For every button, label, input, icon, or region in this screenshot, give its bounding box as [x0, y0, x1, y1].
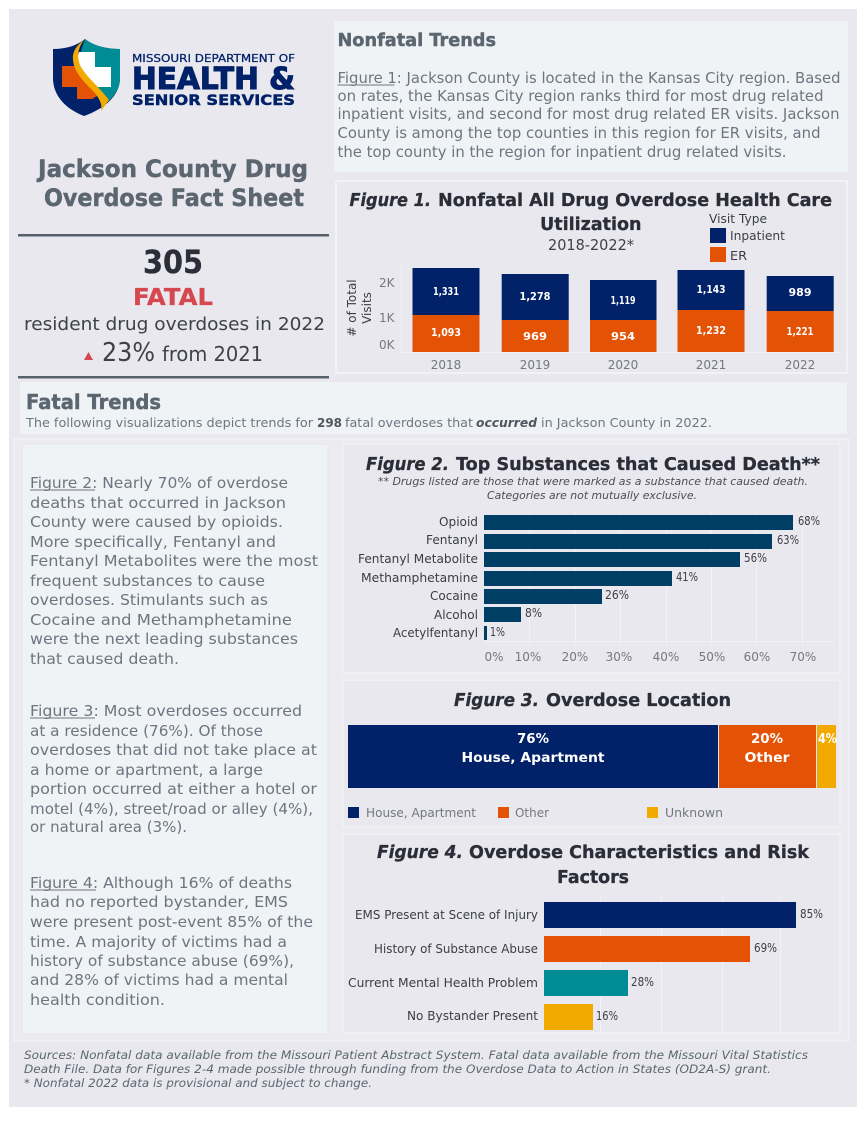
y axis: Visits — [360, 292, 374, 324]
text block: figure 1 description: the top county in the region for inpatient drug related visits. — [338, 143, 786, 161]
bar: 2020 — [590, 280, 656, 372]
text block: figure 4 description — [30, 874, 313, 1009]
icon: up triangle — [84, 352, 93, 360]
bar: 2022: 989 — [788, 286, 812, 299]
bar: history of substance abuse: 69% — [754, 941, 777, 955]
text block: sources and notes — [24, 1048, 808, 1090]
heading: figure 3: Figure 3. — [454, 690, 539, 711]
stacked bar chart — [401, 265, 841, 372]
bar: current mental health problem: Current Mental Health Problem — [348, 976, 538, 990]
y axis: 2K — [379, 276, 396, 290]
title: Overdose Fact Sheet — [44, 184, 304, 212]
segment: other — [719, 725, 816, 788]
title: Jackson County Drug — [36, 155, 308, 183]
title — [36, 155, 308, 212]
legend: location: Other — [515, 806, 549, 820]
heading: figure 4: Factors — [557, 867, 629, 888]
bar: 2022: 2022 — [785, 358, 815, 372]
x axis ticks: 20% — [562, 650, 588, 664]
legend: visit type: ER — [730, 249, 747, 263]
text block: figure 2 description — [30, 474, 318, 668]
text block: figure 2 description: frequent substances to cause — [30, 572, 265, 590]
text block: figure 1 description: Figure 1: Jackson County is located in the Kansas City region. Based — [338, 69, 840, 87]
bar: 2019: 969 — [523, 330, 547, 343]
bar: 2020: 1,119 — [610, 294, 636, 307]
text block: figure 2 description: Figure 2: Nearly 70% of overdose — [30, 474, 288, 492]
text block: figure 4 description: and 28% of victims had a mental — [30, 971, 288, 989]
bar: fentanyl — [426, 533, 799, 549]
bar: 2018 — [412, 268, 480, 372]
panel: figure 3 overdose location — [343, 680, 840, 827]
bar: 2018: 1,331 — [433, 285, 459, 298]
bar: opioid — [439, 514, 820, 530]
bar: history of substance abuse: History of Substance Abuse — [374, 942, 538, 956]
x axis ticks: 0% — [484, 650, 504, 664]
logo text: HEALTH & — [132, 62, 295, 97]
note: drug categories — [378, 476, 808, 502]
text block: figure 1 description: on rates, the Kansas City region ranks third for most drug related — [338, 87, 824, 105]
bar: 2022: 1,221 — [786, 325, 814, 338]
bar: fentanyl: Fentanyl — [426, 533, 478, 547]
bar: EMS present: EMS Present at Scene of Injury — [355, 908, 538, 922]
text block: fatal trends intro: occurred — [476, 415, 538, 430]
bar: EMS present — [355, 902, 823, 928]
bar: cocaine — [430, 588, 629, 604]
bar: alcohol — [434, 606, 542, 622]
bar: 2020: 954 — [611, 330, 635, 343]
text block: fatal trends intro: 298 — [317, 415, 342, 430]
legend: visit type: Inpatient — [730, 229, 785, 243]
bar: 2019: 2019 — [520, 358, 550, 372]
callout: fatal overdose count — [24, 243, 325, 368]
text block: figure 2 description: deaths that occurred in Jackson — [30, 494, 286, 512]
heading: figure 3 — [454, 690, 731, 711]
bar: methamphetamine — [361, 570, 698, 586]
bar: cocaine: 26% — [605, 588, 629, 602]
bar: acetylfentanyl: Acetylfentanyl — [393, 626, 478, 640]
text block: figure 3 description: or natural area (3%). — [30, 818, 187, 836]
text block: figure 2 description: that caused death. — [30, 650, 179, 668]
segment: house, apartment: House, Apartment — [462, 751, 604, 766]
heading: figure 1 — [350, 190, 832, 254]
bar: 2021: 1,232 — [696, 324, 726, 337]
text block: sources and notes: Death File. Data for Figures 2-4 made possible through funding from the Overdose Data to Action in States (OD2A-S) grant. — [24, 1062, 771, 1076]
segment: house, apartment — [348, 725, 718, 788]
callout: fatal overdose count: 23% — [102, 338, 155, 368]
y axis: # of Total — [345, 279, 359, 337]
bar: methamphetamine: 41% — [676, 570, 698, 584]
bar: opioid: 68% — [798, 514, 820, 528]
x axis ticks: 10% — [515, 650, 541, 664]
logo text: SENIOR SERVICES — [132, 93, 295, 109]
text block: figure 3 description: a home or apartment, a large — [30, 761, 263, 779]
segment: house, apartment: 76% — [517, 732, 549, 747]
panel: figure 2 top substances — [343, 444, 840, 673]
heading: figure 1: Figure 1. — [350, 190, 431, 211]
text block: figure 2 description: County were caused by opioids. — [30, 513, 283, 531]
heading: figure 2: Top Substances that Caused Death** — [456, 454, 821, 475]
bar: 2018: 2018 — [431, 358, 461, 372]
bar: alcohol: 8% — [525, 606, 542, 620]
callout: fatal overdose count: 305 — [143, 243, 203, 281]
text block: fatal trends intro: fatal overdoses that — [345, 415, 473, 430]
bar: 2018: 1,093 — [431, 326, 461, 339]
legend: location: Unknown — [665, 806, 723, 820]
bar: 2021: 1,143 — [696, 283, 726, 296]
heading: figure 1: 2018-2022* — [548, 236, 634, 254]
heading: figure 2: Figure 2. — [366, 454, 449, 475]
legend: visit type: Visit Type — [709, 212, 767, 226]
legend: location — [348, 806, 723, 820]
heading: figure 1: Nonfatal All Drug Overdose Health Care — [438, 190, 832, 211]
y axis — [345, 276, 396, 352]
x axis ticks: 70% — [790, 650, 816, 664]
bar chart: substances — [358, 510, 834, 664]
segment: other: 20% — [751, 732, 783, 747]
text block: fatal trends intro — [25, 415, 712, 430]
callout: fatal overdose count: FATAL — [133, 285, 213, 311]
bar: EMS present: 85% — [800, 907, 823, 921]
bar: fentanyl: 63% — [777, 533, 799, 547]
segment: other: Other — [744, 751, 790, 766]
text block: fatal trends intro: The following visualizations depict trends for — [25, 415, 314, 430]
bar: current mental health problem: 28% — [631, 975, 654, 989]
heading: figure 3: Overdose Location — [546, 690, 731, 711]
text block: figure 3 description: portion occurred at either a hotel or — [30, 780, 318, 798]
bar: 2019 — [502, 274, 569, 372]
x axis ticks: 30% — [606, 650, 632, 664]
bar: no bystander present: 16% — [596, 1009, 618, 1023]
heading: figure 1: Utilization — [540, 214, 642, 235]
y axis: 0K — [379, 338, 396, 352]
bar: history of substance abuse — [374, 936, 777, 962]
x axis ticks: 40% — [653, 650, 679, 664]
panel: figure 4 characteristics and risk factors — [343, 834, 840, 1033]
bar: no bystander present — [407, 1004, 618, 1030]
bar: current mental health problem — [348, 970, 654, 996]
segment: unknown — [817, 725, 837, 788]
panel: figure descriptions — [22, 444, 328, 1034]
bar: 2019: 1,278 — [520, 290, 550, 303]
bar: 2021 — [678, 270, 744, 372]
bar: cocaine: Cocaine — [430, 589, 478, 603]
callout: fatal overdose count: resident drug overdoses in 2022 — [24, 314, 325, 335]
panel: nonfatal trends — [334, 21, 848, 172]
text block: figure 1 description: inpatient visits, and second for most drug related ER visits. Jackson — [338, 105, 840, 123]
legend: visit type — [709, 212, 785, 263]
text block: figure 2 description: More specifically, Fentanyl and — [30, 533, 276, 551]
icon: shield — [53, 39, 120, 116]
text block: figure 2 description: Fentanyl Metabolites were the most — [30, 552, 318, 570]
callout: fatal overdose count: from 2021 — [162, 342, 263, 366]
text block: figure 2 description: were the next leading substances — [30, 630, 298, 648]
logo text — [132, 53, 295, 109]
text block: figure 1 description — [338, 69, 840, 161]
text block: figure 4 description: time. A majority of victims had a — [30, 933, 287, 951]
heading: figure 4 — [377, 842, 810, 888]
text block: figure 4 description: health condition. — [30, 991, 165, 1009]
heading: figure 4: Figure 4. — [377, 842, 463, 863]
bar: alcohol: Alcohol — [434, 608, 478, 622]
text block: figure 3 description: overdoses that did not take place at — [30, 741, 317, 759]
text block: sources and notes: Sources: Nonfatal data available from the Missouri Patient Abstract System. Fatal data available from the Missouri Vital Statistics — [24, 1048, 808, 1062]
logo: Missouri Department of Health & Senior Services — [53, 39, 295, 116]
text block: figure 4 description: Figure 4: Although 16% of deaths — [30, 874, 292, 892]
legend: location: House, Apartment — [366, 806, 476, 820]
note: drug categories: Categories are not mutually exclusive. — [487, 490, 697, 502]
bar chart: characteristics — [348, 895, 823, 1032]
text block: figure 3 description: at a residence (76%). Of those — [30, 722, 263, 740]
bar: methamphetamine: Methamphetamine — [361, 571, 478, 585]
x axis ticks: 50% — [699, 650, 725, 664]
note: drug categories: ** Drugs listed are those that were marked as a substance that caused death. — [378, 476, 808, 488]
text block: figure 3 description — [30, 702, 318, 836]
segment: unknown: 4% — [818, 732, 837, 747]
heading: fatal trends: Fatal Trends — [26, 390, 161, 414]
x axis ticks — [484, 650, 816, 664]
bar: 2021: 2021 — [696, 358, 726, 372]
text block: figure 2 description: Cocaine and Methamphetamine — [30, 611, 292, 629]
text block: figure 3 description: motel (4%), street/road or alley (4%), — [30, 800, 313, 818]
bar: acetylfentanyl: 1% — [490, 625, 505, 639]
y axis: 1K — [379, 311, 396, 325]
logo text: MISSOURI DEPARTMENT OF — [132, 53, 295, 65]
x axis ticks: 60% — [744, 650, 770, 664]
heading: nonfatal trends: Nonfatal Trends — [338, 30, 496, 51]
text block: figure 2 description: overdoses. Stimulants such as — [30, 591, 268, 609]
bar: fentanyl metabolite: 56% — [744, 551, 767, 565]
bar: 2020: 2020 — [608, 358, 638, 372]
text block: figure 4 description: had no reported bystander, EMS — [30, 893, 288, 911]
bar: no bystander present: No Bystander Present — [407, 1009, 538, 1023]
bar: opioid: Opioid — [439, 515, 478, 529]
bar: fentanyl metabolite — [358, 551, 767, 567]
heading: figure 4: Overdose Characteristics and Risk — [469, 842, 810, 863]
text block: figure 4 description: history of substance abuse (69%), — [30, 952, 294, 970]
stacked bar: location — [348, 725, 837, 788]
text block: figure 1 description: County is among the top counties in this region for ER visits, and — [338, 124, 820, 142]
panel: figure 1 nonfatal health care utilization — [336, 181, 847, 373]
text block: figure 4 description: were present post-event 85% of the — [30, 913, 313, 931]
panel: fatal trends — [20, 382, 847, 434]
text block: sources and notes: * Nonfatal 2022 data is provisional and subject to change. — [24, 1076, 372, 1090]
bar: 2022 — [767, 276, 834, 372]
text block: fatal trends intro: in Jackson County in 2022. — [541, 415, 712, 430]
bar: fentanyl metabolite: Fentanyl Metabolite — [358, 552, 478, 566]
text block: figure 3 description: Figure 3: Most overdoses occurred — [30, 702, 302, 720]
